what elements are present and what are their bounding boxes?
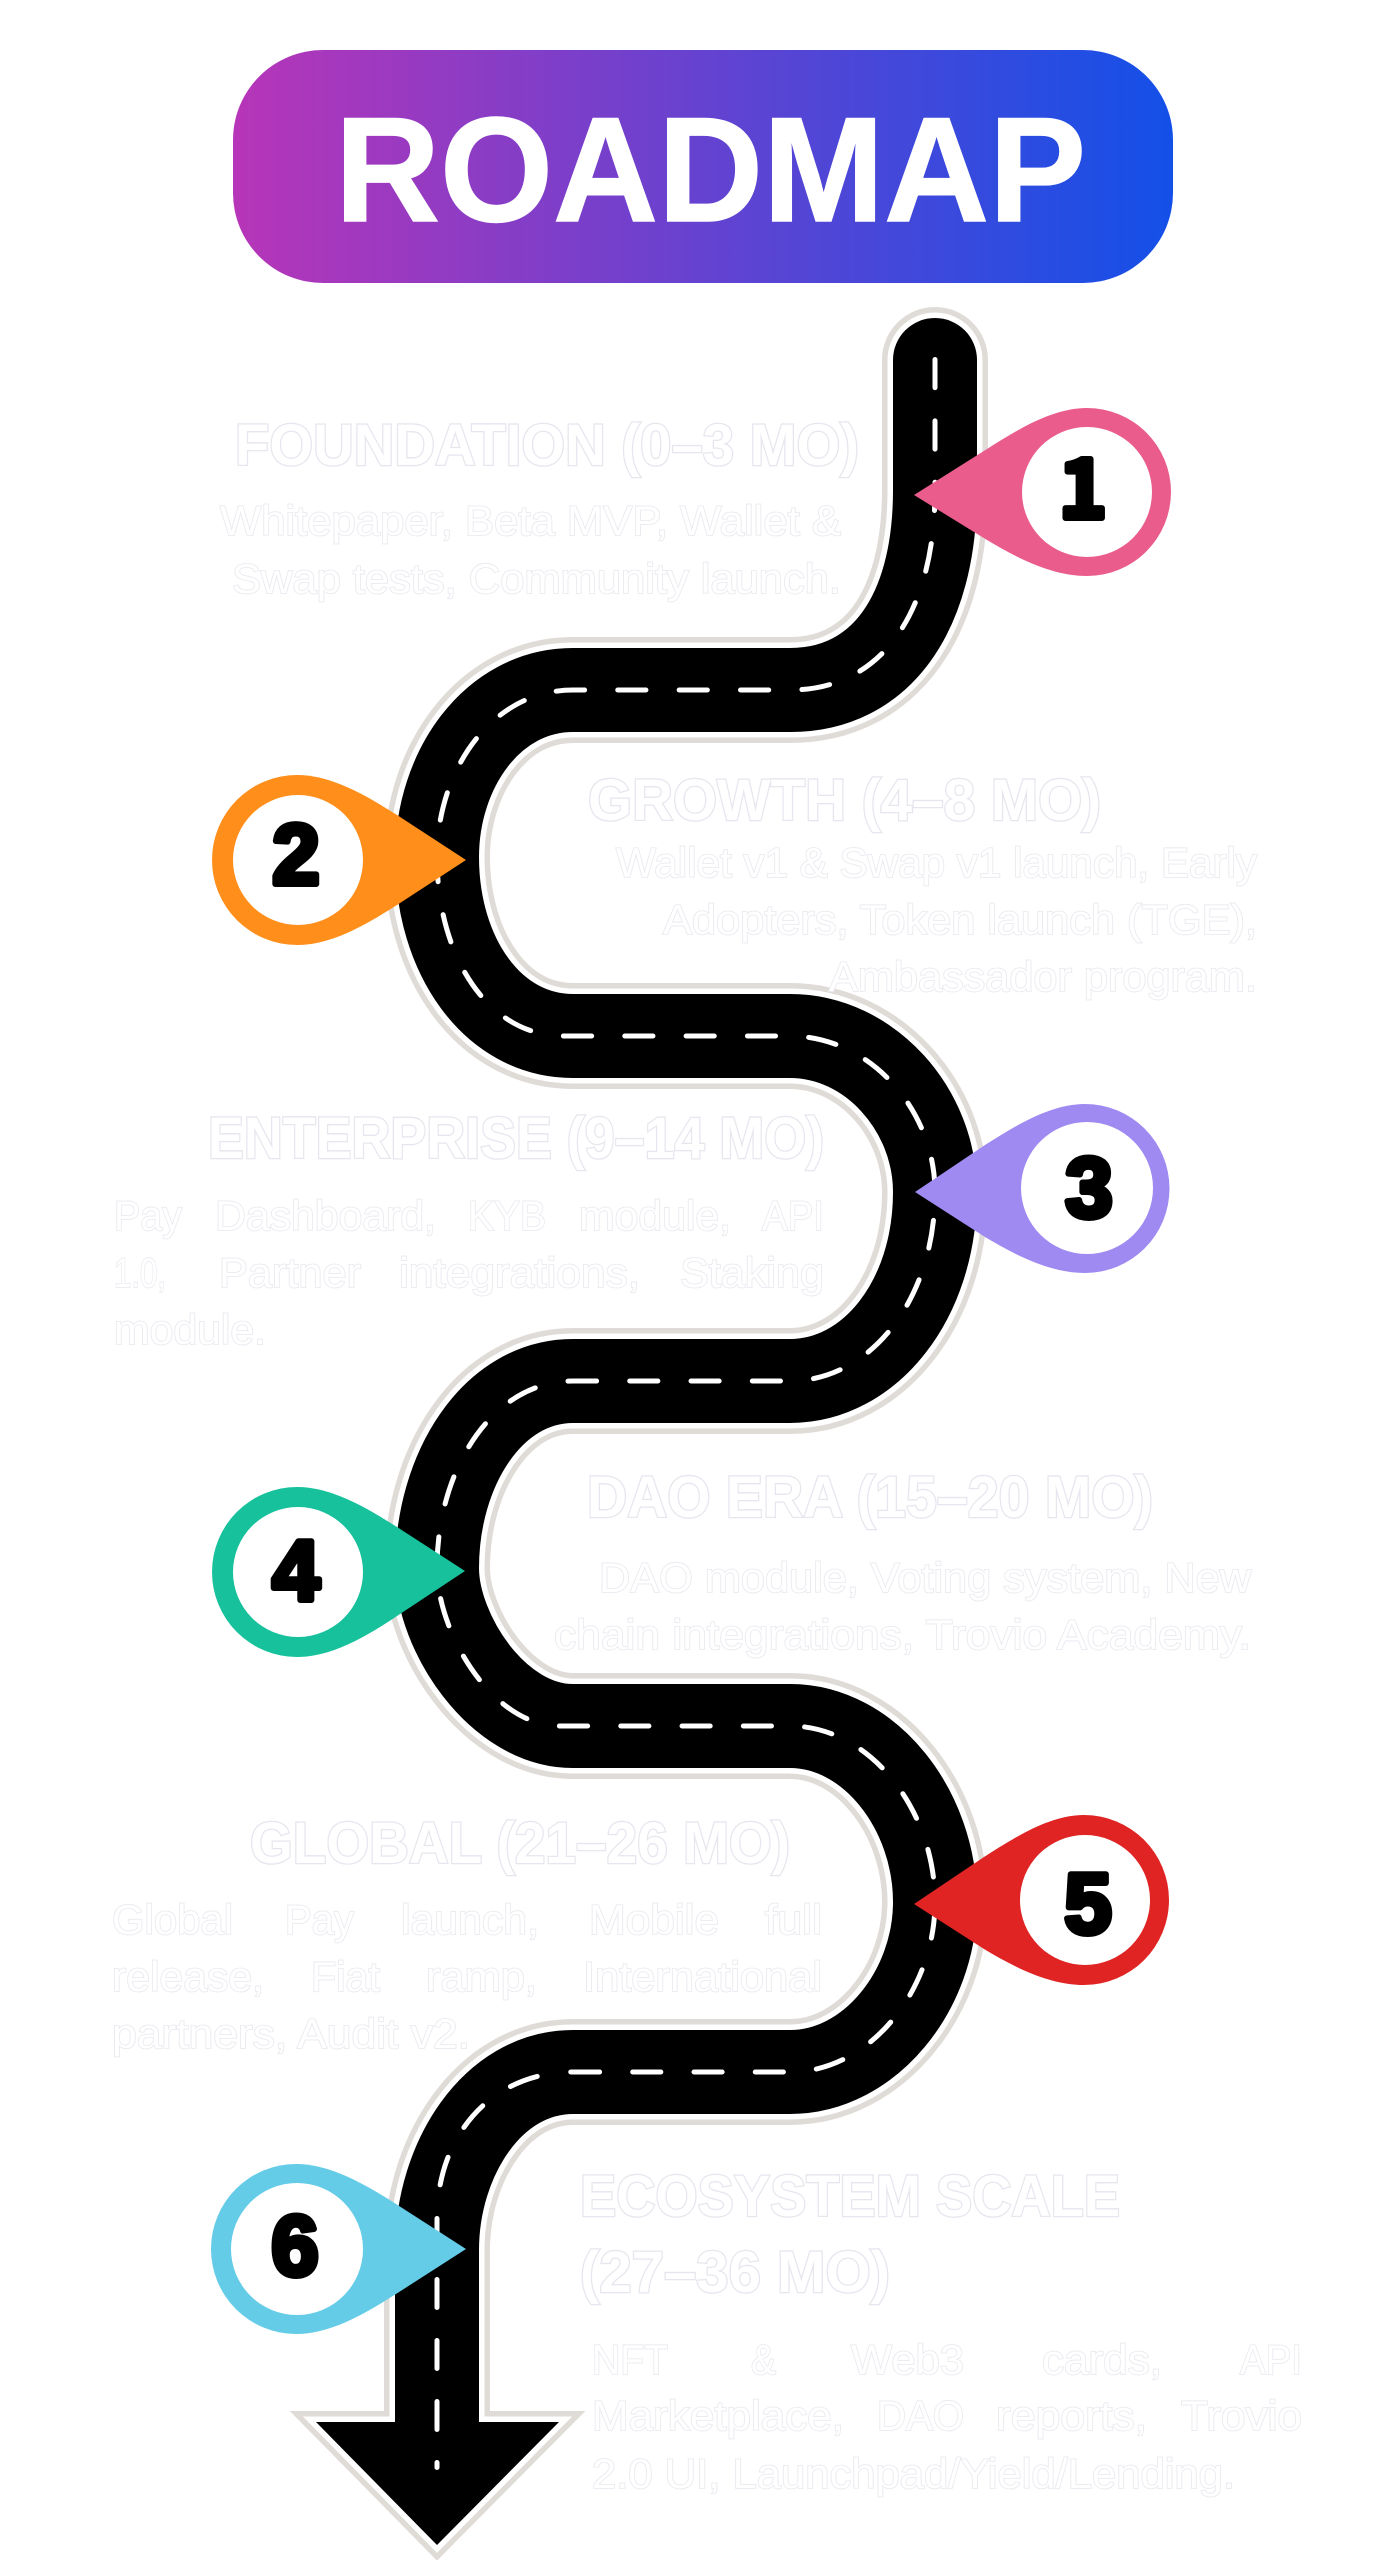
milestone 6 text: Marketplace, [592, 2392, 844, 2439]
milestone 5 text: Pay [285, 1896, 354, 1943]
milestone 4 text: chain integrations, Trovio Academy. [554, 1611, 1251, 1658]
milestone 3 text: module. [114, 1306, 266, 1353]
milestone 6 text: API [1240, 2336, 1302, 2383]
milestone 5 text: Fiat [311, 1953, 380, 2000]
milestone 1 text [220, 413, 859, 602]
milestone 3 text: KYB [468, 1192, 546, 1239]
milestone 4 text: DAO ERA (15–20 MO) [587, 1465, 1153, 1530]
pin 1: 1 [1059, 423, 1107, 542]
milestone 6 text: reports, [996, 2392, 1147, 2439]
milestone 6 text: (27–36 MO) [580, 2240, 890, 2305]
milestone 3 text: API [762, 1192, 824, 1239]
milestone 5 text: GLOBAL (21–26 MO) [250, 1811, 790, 1876]
milestone 1 text: Swap tests, Community launch. [232, 555, 841, 602]
title banner [233, 50, 1173, 283]
milestone 1 text: FOUNDATION (0–3 MO) [235, 413, 859, 478]
pin 4 [212, 1487, 465, 1657]
pin 4: 4 [272, 1524, 320, 1619]
pin 1 [914, 408, 1171, 576]
pin 2 [212, 775, 466, 945]
milestone 2 text: GROWTH (4–8 MO) [588, 768, 1101, 833]
milestone 3 text: 1.0, [114, 1249, 166, 1296]
milestone 3 text: Staking [680, 1249, 824, 1296]
pin 3: 3 [1065, 1141, 1113, 1236]
milestone 5 text [112, 1811, 822, 2057]
pin 6 [211, 2164, 466, 2334]
milestone 5 text: launch, [401, 1896, 539, 1943]
milestone 6 text: DAO [877, 2392, 964, 2439]
milestone 5 text: partners, Audit v2. [112, 2010, 470, 2057]
road with arrow [316, 360, 935, 2545]
milestone 6 text: Trovio [1181, 2392, 1302, 2439]
milestone 3 text [114, 1106, 824, 1353]
milestone 6 text: ECOSYSTEM SCALE [580, 2164, 1120, 2229]
milestone 6 text: 2.0 UI, Launchpad/Yield/Lending. [592, 2450, 1235, 2497]
milestone 6 text: & [751, 2336, 776, 2383]
milestone 5 text: International [583, 1953, 822, 2000]
pin 3 [915, 1104, 1170, 1273]
milestone 2 text: Adopters, Token launch (TGE), [663, 896, 1257, 943]
milestone 5 text: full [765, 1896, 822, 1943]
milestone 4 text: DAO module, Voting system, New [599, 1554, 1252, 1601]
milestone 5 text: release, [112, 1953, 264, 2000]
milestone 3 text: ENTERPRISE (9–14 MO) [208, 1106, 824, 1171]
pin 5: 5 [1064, 1857, 1112, 1952]
milestone 1 text: Whitepaper, Beta MVP, Wallet & [220, 497, 841, 544]
title banner: ROADMAP [335, 86, 1086, 253]
milestone 6 text: cards, [1042, 2336, 1162, 2383]
milestone 3 text: module, [579, 1192, 731, 1239]
milestone 3 text: Pay [114, 1192, 182, 1239]
milestone 2 text: Ambassador program. [829, 953, 1257, 1000]
milestone 3 text: Partner [219, 1249, 361, 1296]
pin 6: 6 [271, 2199, 319, 2294]
milestone 5 text: Mobile [589, 1896, 719, 1943]
milestone 6 text: Web3 [851, 2336, 964, 2383]
milestone 2 text [588, 768, 1257, 1000]
milestone 5 text: ramp, [426, 1953, 537, 2000]
milestone 6 text [580, 2164, 1302, 2497]
milestone 4 text [554, 1465, 1252, 1658]
milestone 5 text: Global [112, 1896, 233, 1943]
milestone 3 text: Dashboard, [215, 1192, 436, 1239]
milestone 3 text: integrations, [399, 1249, 640, 1296]
milestone 2 text: Wallet v1 & Swap v1 launch, Early [616, 839, 1257, 886]
milestone 6 text: NFT [592, 2336, 668, 2383]
pin 5 [914, 1815, 1169, 1985]
pin 2: 2 [272, 808, 320, 903]
